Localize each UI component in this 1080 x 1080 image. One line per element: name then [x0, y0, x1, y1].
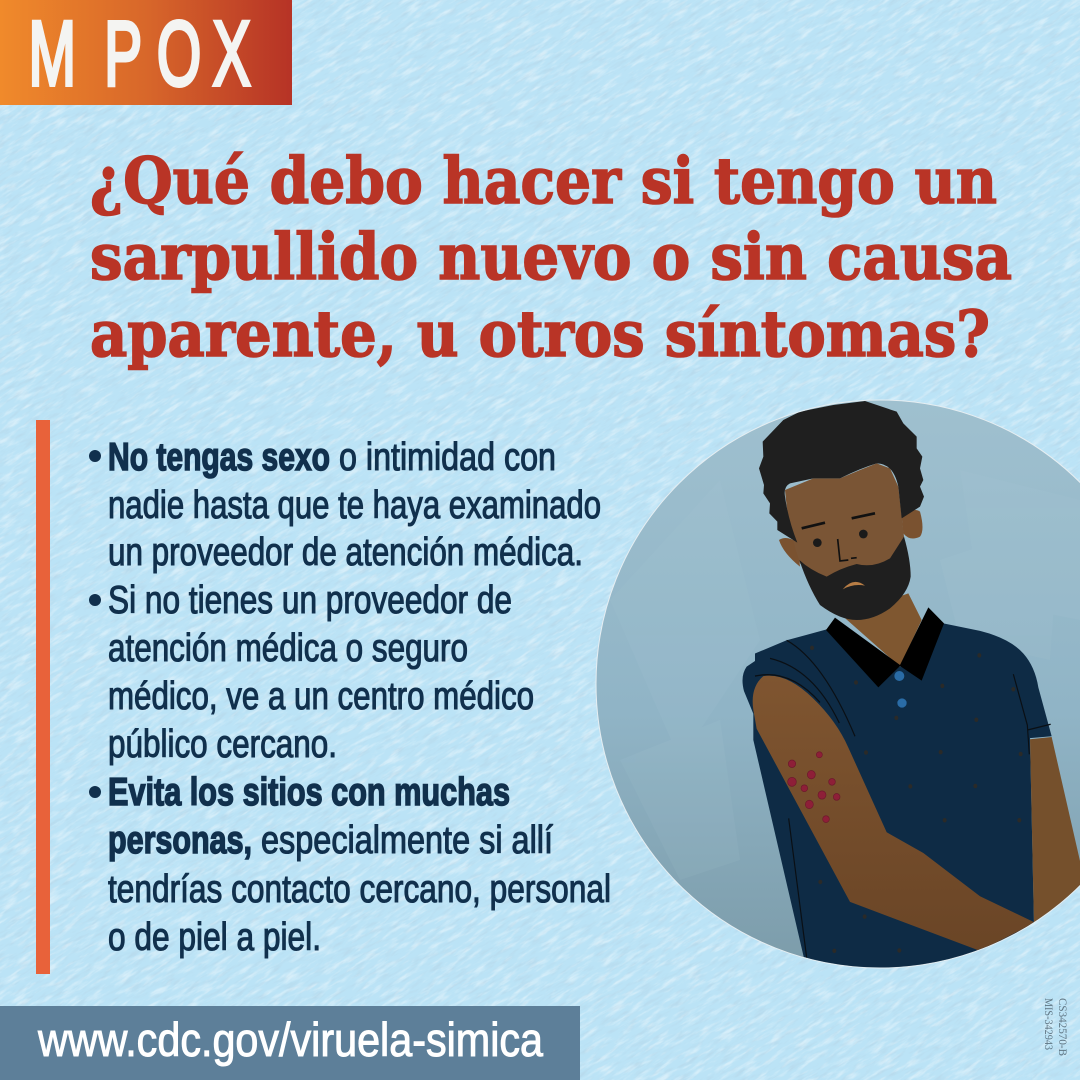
head and collar: [759, 401, 944, 708]
bullet 2: médico, ve a un centro médico: [108, 675, 534, 718]
body: [742, 623, 1080, 970]
hair: [759, 401, 924, 543]
facial features: [802, 513, 875, 561]
mouth: [843, 582, 865, 589]
url bar: [0, 1006, 580, 1080]
bullet 1: un proveedor de atención médica.: [108, 531, 583, 574]
bullet 2: [89, 579, 534, 766]
url bar: www.cdc.gov/viruela-simica: [37, 1013, 544, 1066]
neck: [843, 593, 922, 667]
bullet 1: o intimidad con: [339, 436, 556, 479]
bullet 2: Si no tienes un proveedor de: [108, 579, 512, 622]
bullet 3: personas,: [108, 819, 252, 862]
bullet list: [89, 436, 611, 959]
bullet 2: atención médica o seguro: [108, 627, 468, 670]
left arm with rash: [753, 676, 1035, 951]
shirt details: [755, 640, 1051, 958]
bullet 3: tendrías contacto cercano, personal: [108, 868, 611, 911]
buttons: [894, 671, 907, 708]
right arm: [1030, 737, 1080, 924]
side codes: MIS-342943: [1042, 998, 1056, 1050]
face: [785, 463, 904, 587]
title: sarpullido nuevo o sin causa: [90, 220, 1012, 295]
banner: MPOX: MPOX: [29, 3, 251, 105]
bullet 3: especialmente si allí: [261, 819, 553, 862]
figure: [742, 401, 1080, 968]
shirt: [742, 623, 1052, 970]
ears: [779, 510, 922, 567]
bullet 1: [89, 436, 601, 574]
bullet 3: [89, 771, 611, 959]
collar: [826, 607, 944, 687]
title: aparente, u otros síntomas?: [90, 297, 990, 372]
bullet 1: nadie hasta que te haya examinado: [108, 484, 601, 527]
backdrop facets: [610, 470, 1080, 880]
illustration: man showing rash on arm: [596, 400, 1080, 970]
backdrop circle: [596, 400, 1080, 968]
side codes: [1042, 998, 1070, 1056]
side codes: CS342570-B: [1056, 998, 1070, 1056]
beard: [799, 537, 911, 620]
bullet 3: o de piel a piel.: [108, 916, 321, 959]
accent bar: [36, 420, 50, 974]
bullet 2: público cercano.: [108, 723, 337, 766]
bullet 3: Evita los sitios con muchas: [108, 771, 510, 814]
title: [90, 144, 1012, 372]
bullet 1: No tengas sexo: [108, 436, 330, 479]
